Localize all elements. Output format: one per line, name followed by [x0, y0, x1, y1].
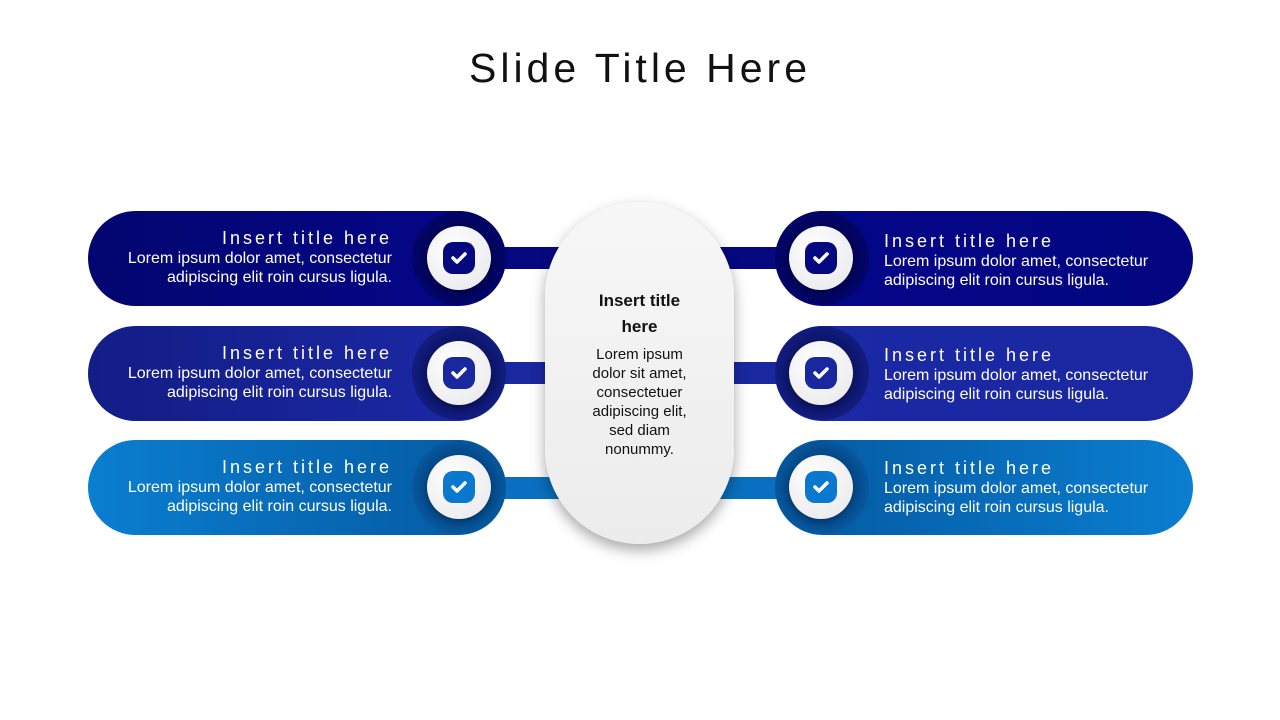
- center text: Lorem ipsum: [596, 346, 683, 363]
- panel: center capsule: [545, 202, 734, 544]
- text left 3: [128, 457, 392, 515]
- panel: left 2: [88, 326, 506, 421]
- text right 2: Lorem ipsum dolor amet, consectetur: [884, 367, 1148, 384]
- text left 2: Lorem ipsum dolor amet, consectetur: [128, 365, 392, 382]
- text left 2: [128, 343, 392, 401]
- text left 3: adipiscing elit roin cursus ligula.: [167, 498, 392, 515]
- center text: sed diam: [609, 422, 670, 439]
- text right 3: adipiscing elit roin cursus ligula.: [884, 499, 1109, 516]
- center title: [599, 291, 680, 336]
- center title: here: [622, 317, 657, 336]
- text left 1: Lorem ipsum dolor amet, consectetur: [128, 250, 392, 267]
- text left 2: adipiscing elit roin cursus ligula.: [167, 384, 392, 401]
- text left 2: Insert title here: [222, 343, 392, 363]
- icon: check right 3: [775, 440, 869, 534]
- panel: right 2: [775, 326, 1193, 421]
- text left 1: [128, 228, 392, 286]
- text left 1: adipiscing elit roin cursus ligula.: [167, 269, 392, 286]
- panel: right 1: [775, 211, 1193, 306]
- panel: left 1: [88, 211, 506, 306]
- icon: check left 1: [412, 211, 506, 305]
- icon: check right 1: [775, 211, 869, 305]
- center title: Insert title: [599, 291, 680, 310]
- text right 3: Insert title here: [884, 458, 1054, 478]
- center text: nonummy.: [605, 441, 674, 458]
- icon: check left 2: [412, 326, 506, 420]
- text right 2: [884, 345, 1148, 403]
- text right 3: [884, 458, 1148, 516]
- center text: dolor sit amet,: [592, 365, 687, 382]
- icon: check left 3: [412, 440, 506, 534]
- text left 3: Insert title here: [222, 457, 392, 477]
- icon: check right 2: [775, 326, 869, 420]
- center text: consectetuer: [597, 384, 682, 401]
- panel: right 3: [775, 440, 1193, 535]
- title: Slide Title Here: [469, 45, 811, 91]
- panel: left 3: [88, 440, 506, 535]
- text right 2: adipiscing elit roin cursus ligula.: [884, 386, 1109, 403]
- text right 3: Lorem ipsum dolor amet, consectetur: [884, 480, 1148, 497]
- center text: [592, 346, 687, 458]
- text right 1: Lorem ipsum dolor amet, consectetur: [884, 253, 1148, 270]
- text left 1: Insert title here: [222, 228, 392, 248]
- text right 1: Insert title here: [884, 231, 1054, 251]
- text right 1: adipiscing elit roin cursus ligula.: [884, 272, 1109, 289]
- center text: adipiscing elit,: [592, 403, 687, 420]
- text right 1: [884, 231, 1148, 289]
- text left 3: Lorem ipsum dolor amet, consectetur: [128, 479, 392, 496]
- text right 2: Insert title here: [884, 345, 1054, 365]
